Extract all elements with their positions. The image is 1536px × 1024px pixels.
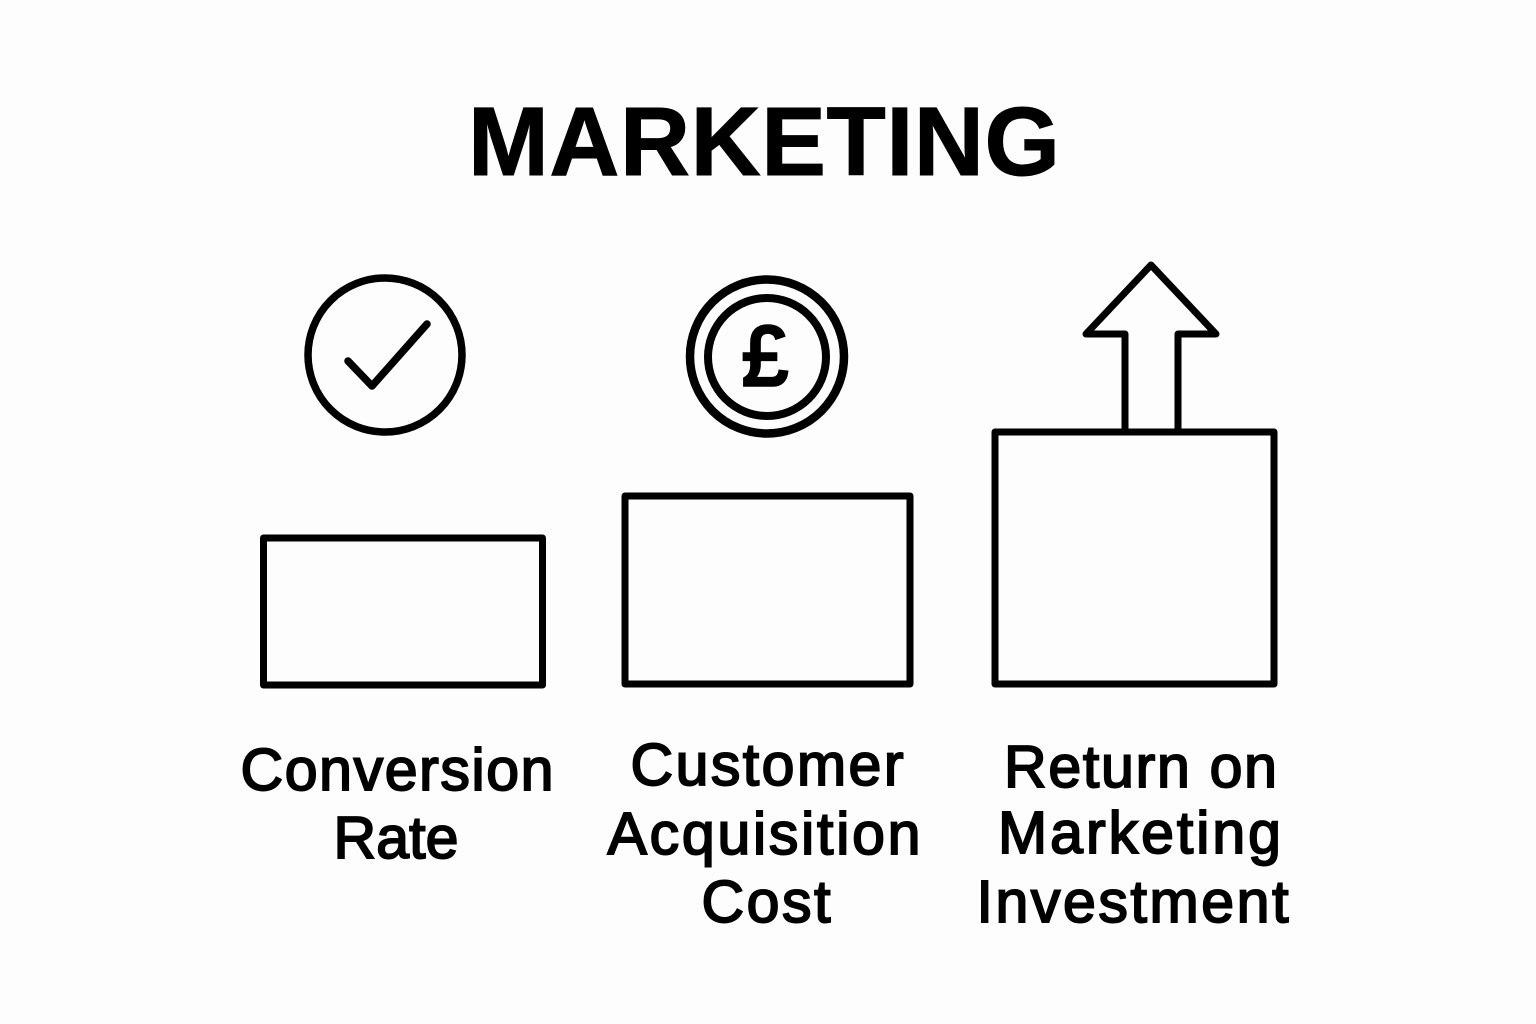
label: customer acquisition cost: Acquisition bbox=[608, 801, 920, 867]
label: conversion rate bbox=[240, 737, 554, 871]
label: customer acquisition cost bbox=[608, 732, 920, 935]
icon: pound coin: £ bbox=[742, 309, 788, 403]
bar: customer acquisition cost bbox=[625, 496, 910, 684]
icon: check circle bbox=[308, 278, 462, 432]
label: conversion rate: Conversion bbox=[240, 737, 554, 803]
title: MARKETING bbox=[468, 87, 1060, 196]
label: customer acquisition cost: Customer bbox=[630, 732, 904, 798]
bar: conversion rate bbox=[264, 538, 542, 685]
icon: up arrow bbox=[1086, 265, 1216, 431]
icon: pound coin bbox=[690, 280, 844, 434]
label: return on marketing investment: Marketing bbox=[998, 800, 1281, 866]
label: return on marketing investment: Return on bbox=[1004, 734, 1277, 800]
label: conversion rate: Rate bbox=[334, 805, 458, 871]
label: return on marketing investment: Investment bbox=[976, 869, 1288, 935]
label: return on marketing investment bbox=[976, 734, 1288, 935]
label: customer acquisition cost: Cost bbox=[702, 869, 830, 935]
bar: return on marketing investment bbox=[995, 432, 1274, 684]
